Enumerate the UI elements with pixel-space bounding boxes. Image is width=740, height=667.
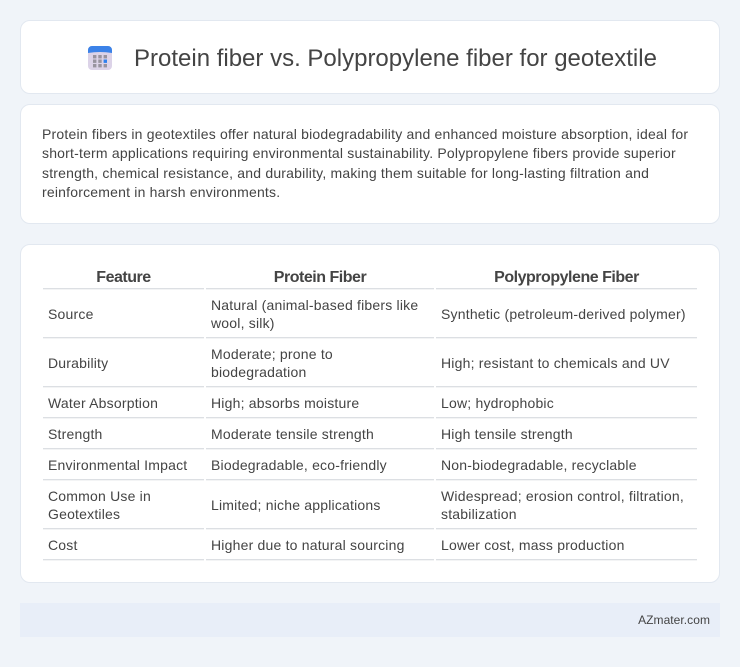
comparison table panel <box>20 244 720 583</box>
table header: polypropylene fiber: Polypropylene Fiber <box>494 269 639 286</box>
row: cost <box>48 537 625 553</box>
row: cost: Lower cost, mass production <box>441 537 625 553</box>
row: durability: Moderate; prone to <box>211 346 333 362</box>
row: durability <box>48 346 670 380</box>
row: strength: Moderate tensile strength <box>211 426 374 442</box>
table header: feature: Feature <box>96 269 151 286</box>
row: source: Source <box>48 306 94 322</box>
row: cost: Cost <box>48 537 78 553</box>
row: environmental impact: Environmental Impact <box>48 457 187 473</box>
row: common use <box>48 488 684 522</box>
row: source <box>48 297 686 331</box>
icon: calendar <box>88 46 112 70</box>
row: water absorption: High; absorbs moisture <box>211 395 359 411</box>
summary text: short-term applications requiring environmental sustainability. Polypropylene fibers provide superior <box>42 145 676 161</box>
row: durability: High; resistant to chemicals and UV <box>441 355 670 371</box>
row: common use: Geotextiles <box>48 506 120 522</box>
summary panel <box>20 104 720 224</box>
footer bar <box>20 603 720 637</box>
row: environmental impact: Non-biodegradable, recyclable <box>441 457 637 473</box>
row: strength <box>48 426 573 442</box>
row: environmental impact: Biodegradable, eco-friendly <box>211 457 387 473</box>
summary text: Protein fibers in geotextiles offer natural biodegradability and enhanced moisture absorption, ideal for <box>42 126 688 142</box>
footer brand: AZmater.com <box>638 613 710 627</box>
row: strength: Strength <box>48 426 103 442</box>
row: source: Synthetic (petroleum-derived polymer) <box>441 306 686 322</box>
row: water absorption: Low; hydrophobic <box>441 395 554 411</box>
row: environmental impact <box>48 457 637 473</box>
summary text: strength, chemical resistance, and durability, making them suitable for long-lasting filtration and <box>42 165 649 181</box>
table header: protein fiber: Protein Fiber <box>274 269 366 286</box>
row: cost: Higher due to natural sourcing <box>211 537 405 553</box>
row: common use: stabilization <box>441 506 517 522</box>
row: strength: High tensile strength <box>441 426 573 442</box>
summary text <box>42 126 688 200</box>
row: source: wool, silk) <box>211 315 275 331</box>
row: common use: Widespread; erosion control, filtration, <box>441 488 684 504</box>
row: water absorption <box>48 395 554 411</box>
title: Protein fiber vs. Polypropylene fiber for geotextile <box>134 45 657 72</box>
row: durability: biodegradation <box>211 364 306 380</box>
header panel <box>20 20 720 94</box>
row: common use: Limited; niche applications <box>211 497 381 513</box>
row: water absorption: Water Absorption <box>48 395 158 411</box>
summary text: reinforcement in harsh environments. <box>42 184 280 200</box>
row: common use: Common Use in <box>48 488 151 504</box>
row: source: Natural (animal-based fibers like <box>211 297 418 313</box>
row: durability: Durability <box>48 355 108 371</box>
